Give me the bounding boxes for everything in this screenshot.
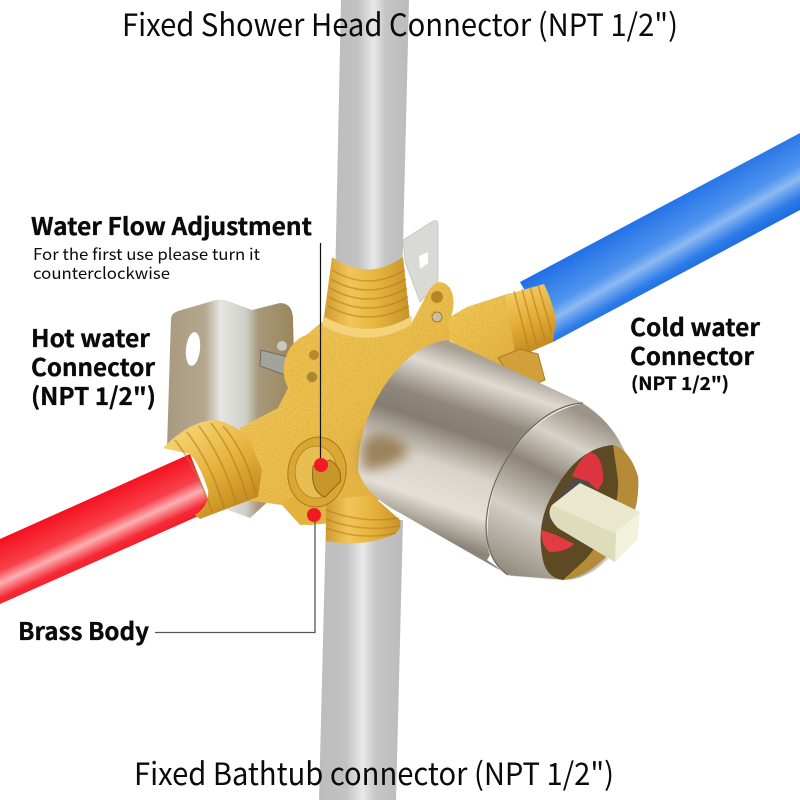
label: water flow adjustment: counterclockwise: [33, 260, 170, 284]
label: hot water connector: Hot water: [31, 319, 151, 354]
label: cold water connector: Cold water: [630, 308, 761, 343]
callout line: brass body: [155, 515, 315, 632]
label: water flow adjustment: For the first use please turn it: [33, 241, 260, 265]
cold thread: [505, 284, 556, 358]
brass valve body: [240, 282, 460, 525]
title: shower head connector: Fixed Shower Head Connector (NPT 1/2"): [122, 0, 678, 45]
title: bathtub connector: Fixed Bathtub connector (NPT 1/2"): [134, 749, 614, 794]
left ear: [278, 329, 342, 405]
label: hot water connector: [31, 319, 156, 412]
sleeve shadow: [362, 434, 410, 470]
sleeve end cap: [487, 403, 638, 580]
callout line: water flow adjustment: [320, 243, 322, 465]
label: hot water connector: Connector: [31, 348, 156, 383]
label: brass body: Brass Body: [18, 612, 149, 647]
hot water fitting thread: [163, 420, 262, 519]
cap opening with cartridge: [541, 445, 638, 580]
label: water flow adjustment: [31, 207, 312, 284]
callout dot: brass body: [307, 508, 321, 522]
bottom thread: [326, 495, 400, 543]
seam line: [486, 403, 583, 575]
rear bracket right: [403, 220, 438, 302]
label: water flow adjustment: Water Flow Adjustment: [31, 207, 312, 242]
label: hot water connector: (NPT 1/2"): [31, 377, 156, 412]
bracket slot: [184, 331, 202, 367]
nickel cylinder sleeve: [358, 340, 583, 576]
top thread: [323, 257, 412, 338]
red seal ring: [572, 452, 603, 490]
red hot water pipe: [0, 454, 212, 604]
callout dot: flow adjustment: [314, 458, 328, 472]
cold side nut: [498, 349, 545, 390]
label: cold water connector: Connector: [630, 337, 755, 372]
threaded bolt: [260, 341, 292, 376]
left mounting bracket: [167, 300, 294, 518]
cartridge stem: [550, 483, 640, 562]
label: cold water connector: (NPT 1/2"): [631, 370, 729, 396]
bottom gray pipe: [319, 520, 403, 800]
cold water fitting: [436, 284, 556, 390]
right ear holes: [431, 291, 443, 322]
top gray pipe: [335, 0, 409, 285]
flow adjustment screw: [283, 433, 351, 525]
label: cold water connector: [630, 308, 761, 396]
blue cold water pipe: [520, 133, 800, 342]
